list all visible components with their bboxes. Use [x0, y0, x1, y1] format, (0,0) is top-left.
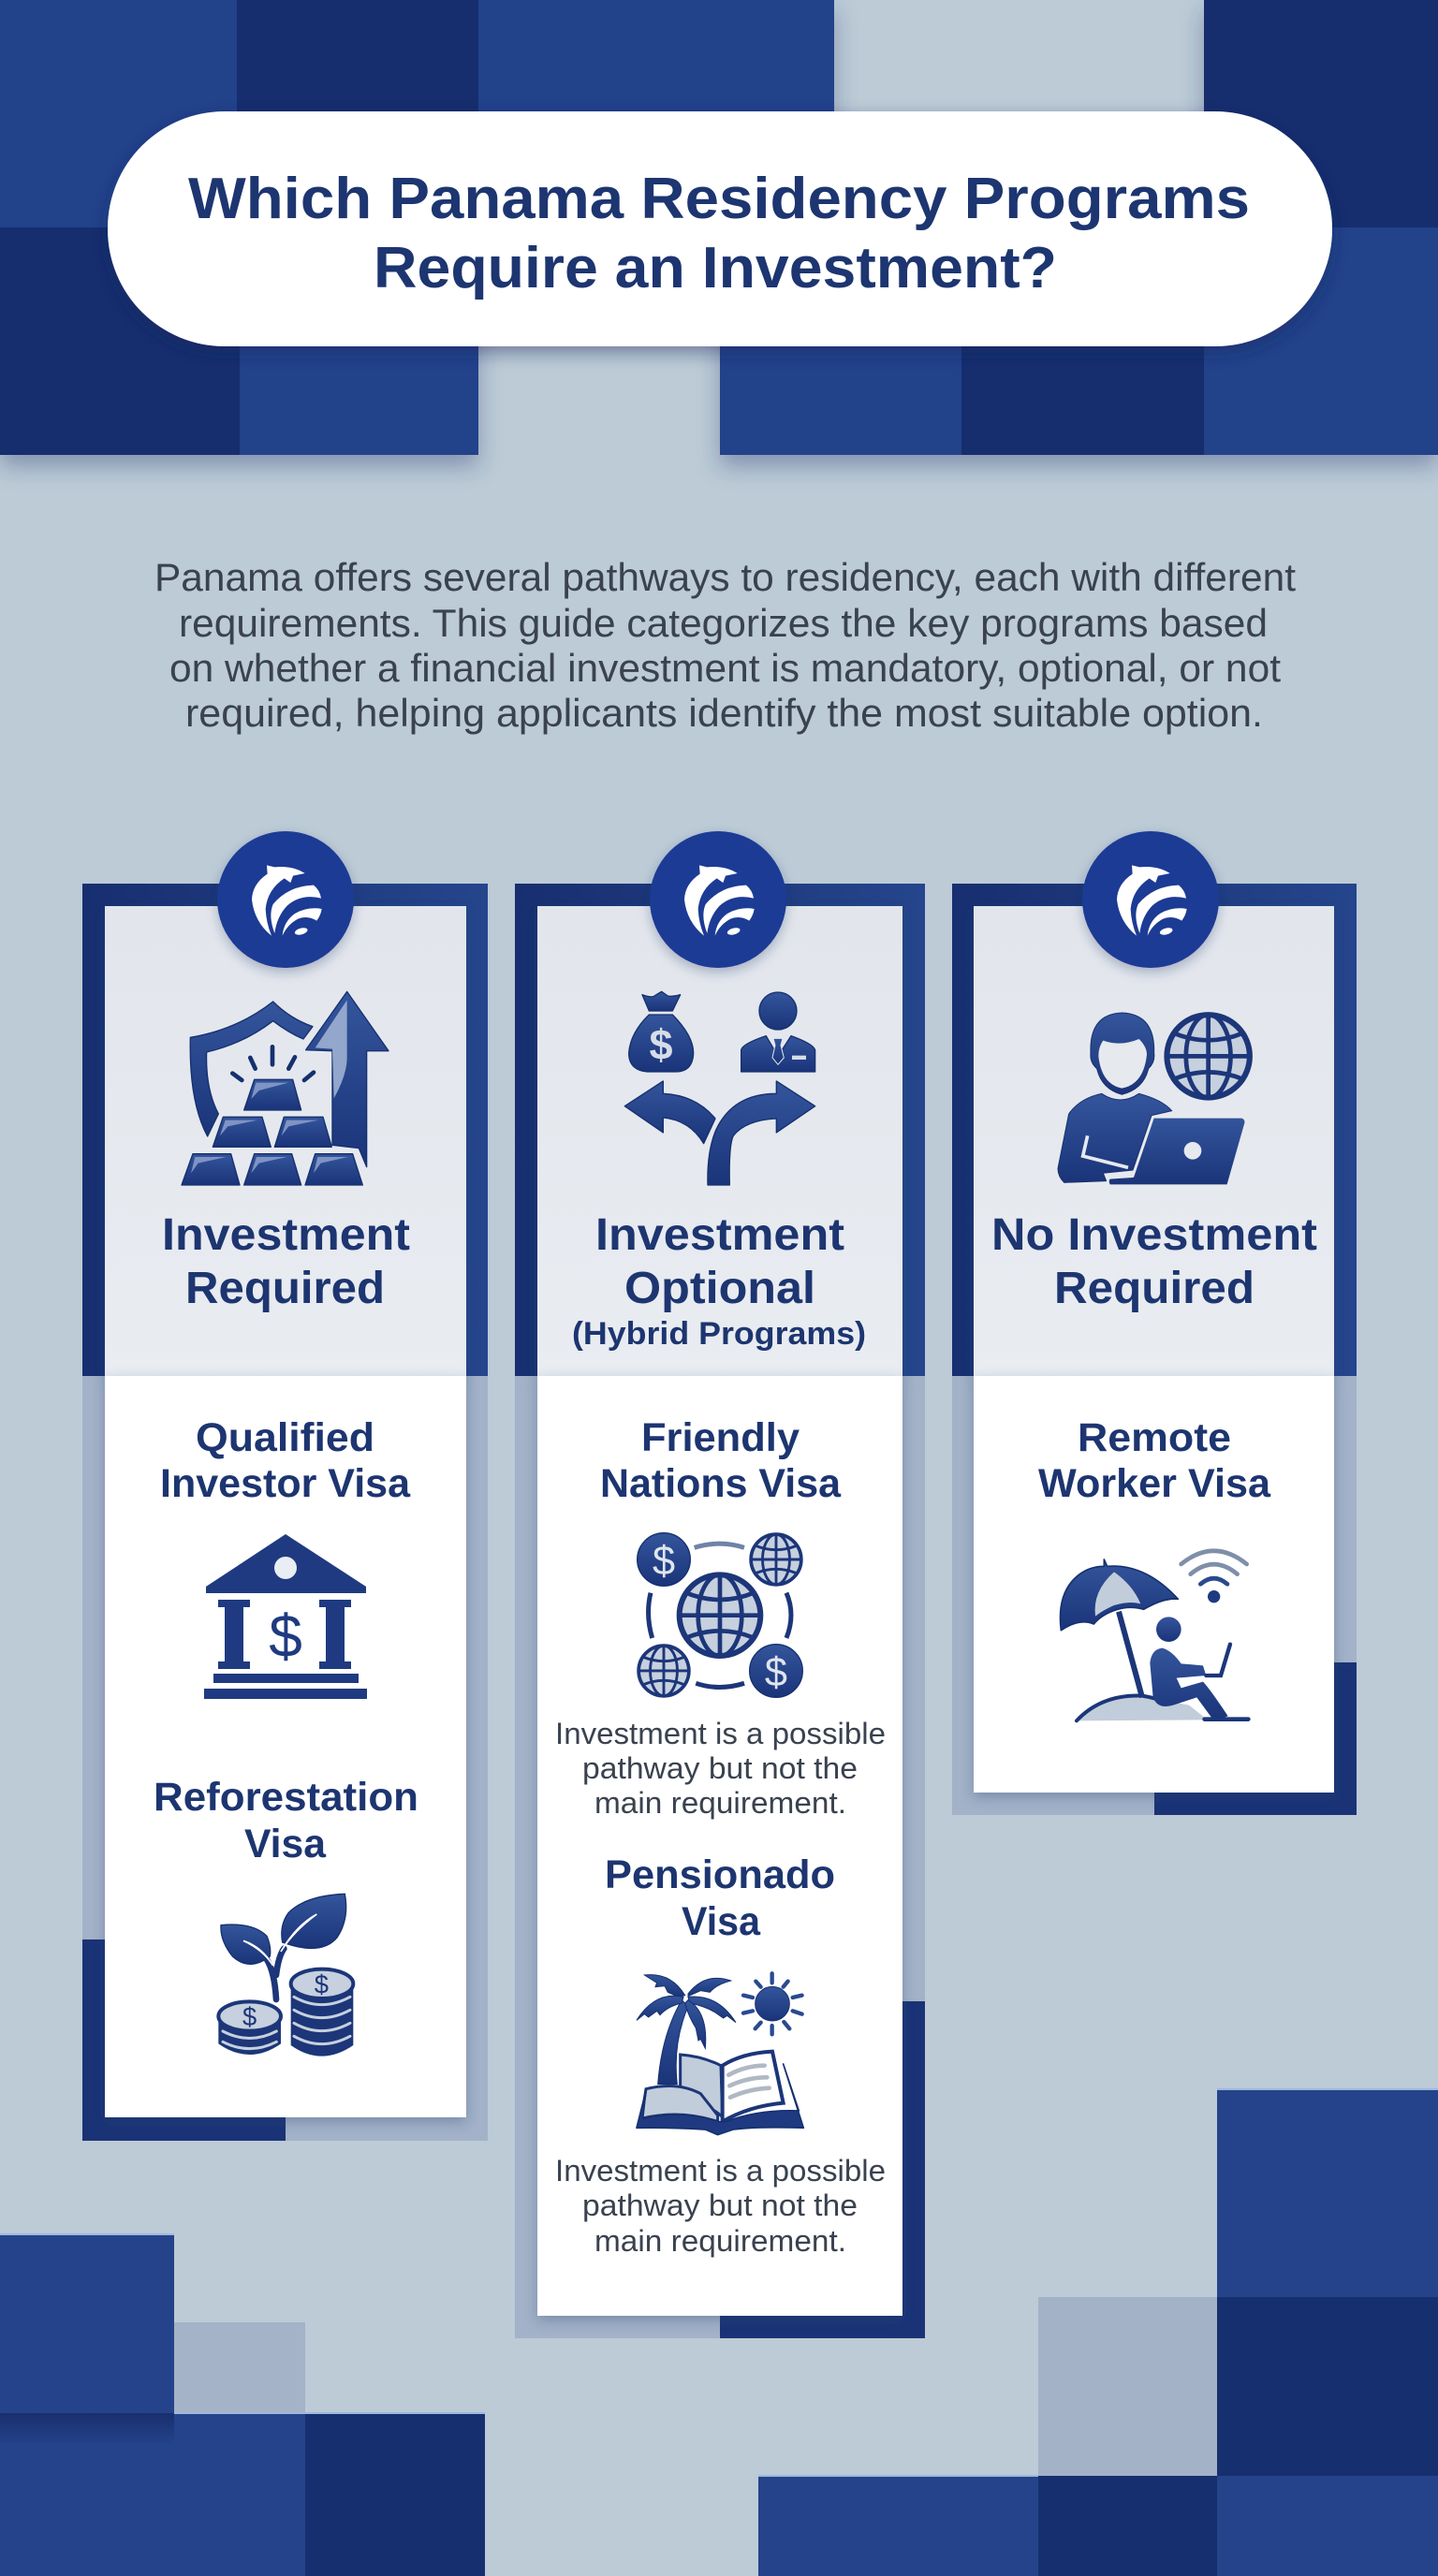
note: pensionado: pathway but not the: [582, 2188, 858, 2222]
badge: dolphin logo: [1082, 831, 1219, 968]
card header: [105, 906, 466, 1376]
icon: beach remote worker: [1060, 1551, 1248, 1720]
heading: investment optional: Investment: [595, 1210, 844, 1260]
title pill: [108, 111, 1332, 346]
note: friendly nations: [555, 1717, 886, 1820]
header colour blocks: [0, 0, 1438, 455]
note: friendly nations: Investment is a possible: [555, 1717, 886, 1750]
heading: investment optional: Optional: [624, 1264, 815, 1313]
label: qualified investor visa: [160, 1415, 411, 1506]
icon: bank: $: [269, 1603, 302, 1670]
frame: [82, 884, 488, 2141]
label: remote worker visa: [1038, 1415, 1271, 1506]
heading: investment optional: [572, 1210, 866, 1352]
note: pensionado: [555, 2154, 886, 2258]
label: remote worker visa: Worker Visa: [1038, 1461, 1271, 1506]
note: friendly nations: main requirement.: [594, 1786, 846, 1820]
label: pensionado visa: Visa: [682, 1899, 761, 1944]
card header: [537, 906, 902, 1376]
label: reforestation visa: Reforestation: [154, 1775, 418, 1820]
label: remote worker visa: Remote: [1078, 1415, 1231, 1460]
icon: gold bars with shield and arrow: [182, 991, 389, 1185]
panel: investment optional: [515, 831, 925, 2338]
icon: plant and coins: $: [315, 1969, 329, 1998]
note: pensionado: Investment is a possible: [555, 2154, 886, 2188]
badge: dolphin logo: [650, 831, 786, 968]
label: friendly nations visa: [600, 1415, 842, 1506]
label: pensionado visa: Pensionado: [605, 1852, 835, 1897]
card body: [974, 1376, 1334, 1793]
panel: no investment required: [952, 831, 1357, 1815]
icon: globes and coins: $: [765, 1650, 787, 1695]
label: reforestation visa: [154, 1775, 418, 1866]
icon: money or person fork: [624, 991, 815, 1185]
heading: investment required: Required: [185, 1264, 385, 1313]
title: Which Panama Residency Programs: [188, 167, 1250, 231]
icon: plant and coins: [218, 1894, 353, 2056]
label: reforestation visa: Visa: [244, 1822, 327, 1866]
badge: dolphin logo: [217, 831, 354, 968]
footer colour blocks left: [0, 2234, 485, 2576]
heading: no investment required: Required: [1054, 1264, 1255, 1313]
label: pensionado visa: [605, 1852, 835, 1944]
heading: investment required: [162, 1210, 410, 1313]
heading: no investment required: No Investment: [991, 1210, 1317, 1260]
title: [188, 167, 1250, 300]
intro paragraph: on whether a financial investment is mandatory, optional, or not: [169, 646, 1281, 690]
label: qualified investor visa: Qualified: [196, 1415, 374, 1460]
icon: bank: [204, 1534, 367, 1699]
heading: investment optional: (Hybrid Programs): [572, 1316, 866, 1352]
title: Require an Investment?: [374, 236, 1057, 300]
heading: investment required: Investment: [162, 1210, 410, 1260]
note: pensionado: main requirement.: [594, 2224, 846, 2258]
frame: [515, 884, 925, 2338]
panel: investment required: [82, 831, 488, 2141]
intro paragraph: requirements. This guide categorizes the key programs based: [179, 601, 1268, 645]
icon: remote person with globe and laptop: [1058, 1013, 1250, 1186]
icon: globes and coins: $: [653, 1539, 675, 1584]
card body: [105, 1376, 466, 2117]
note: friendly nations: pathway but not the: [582, 1751, 858, 1785]
label: qualified investor visa: Investor Visa: [160, 1461, 411, 1506]
icon: globes and coins: [638, 1533, 802, 1697]
icon: plant and coins: $: [242, 2002, 257, 2031]
footer colour blocks right: [758, 2089, 1438, 2576]
label: friendly nations visa: Nations Visa: [600, 1461, 842, 1506]
intro paragraph: Panama offers several pathways to residency, each with different: [154, 555, 1296, 599]
intro paragraph: [154, 555, 1296, 735]
card header: [974, 906, 1334, 1376]
icon: money or person fork: $: [649, 1021, 673, 1069]
card body: [537, 1376, 902, 2316]
frame: [952, 884, 1357, 1815]
intro paragraph: required, helping applicants identify the most suitable option.: [185, 691, 1263, 735]
label: friendly nations visa: Friendly: [641, 1415, 800, 1460]
heading: no investment required: [991, 1210, 1317, 1313]
icon: palm, sun and book: [637, 1973, 803, 2135]
